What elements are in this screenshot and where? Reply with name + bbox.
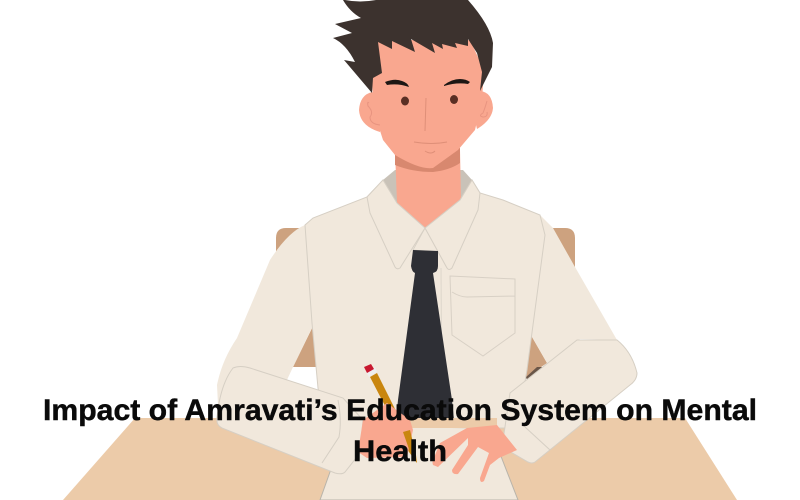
- pocket: [450, 276, 515, 356]
- eyebrows: [385, 80, 409, 87]
- placket: [441, 268, 442, 420]
- table strip above paper: [408, 418, 497, 428]
- hair highlight: [345, 0, 376, 2]
- table: [63, 418, 737, 500]
- neck skin: [395, 150, 461, 229]
- title: [43, 394, 757, 468]
- writing hand: [358, 403, 413, 458]
- pencil tip: [403, 430, 417, 463]
- head: [333, 0, 493, 168]
- pencil: [364, 364, 417, 463]
- title: Health: [353, 435, 447, 468]
- collar: [367, 180, 480, 270]
- paper: [320, 427, 518, 500]
- hair: [333, 0, 493, 93]
- eyes: [401, 96, 409, 106]
- tie: [396, 250, 454, 420]
- right upper arm: [520, 215, 617, 363]
- right hand: [432, 425, 517, 482]
- right forearm: [502, 340, 637, 463]
- neck: [383, 148, 472, 229]
- face: [372, 40, 484, 168]
- left cuff line: [322, 400, 340, 463]
- left forearm: [217, 366, 363, 474]
- right cuff line: [525, 427, 550, 450]
- collar shadow: [383, 170, 472, 203]
- ear lines: [368, 101, 487, 125]
- ears: [359, 92, 386, 132]
- shirt torso and arms: [217, 180, 617, 428]
- torso: [305, 180, 545, 428]
- title: Impact of Amravati’s Education System on Mental: [43, 394, 757, 427]
- neck shadow: [395, 148, 460, 172]
- nose and mouth: [414, 98, 447, 153]
- chair: [276, 228, 575, 380]
- left upper arm: [217, 225, 325, 425]
